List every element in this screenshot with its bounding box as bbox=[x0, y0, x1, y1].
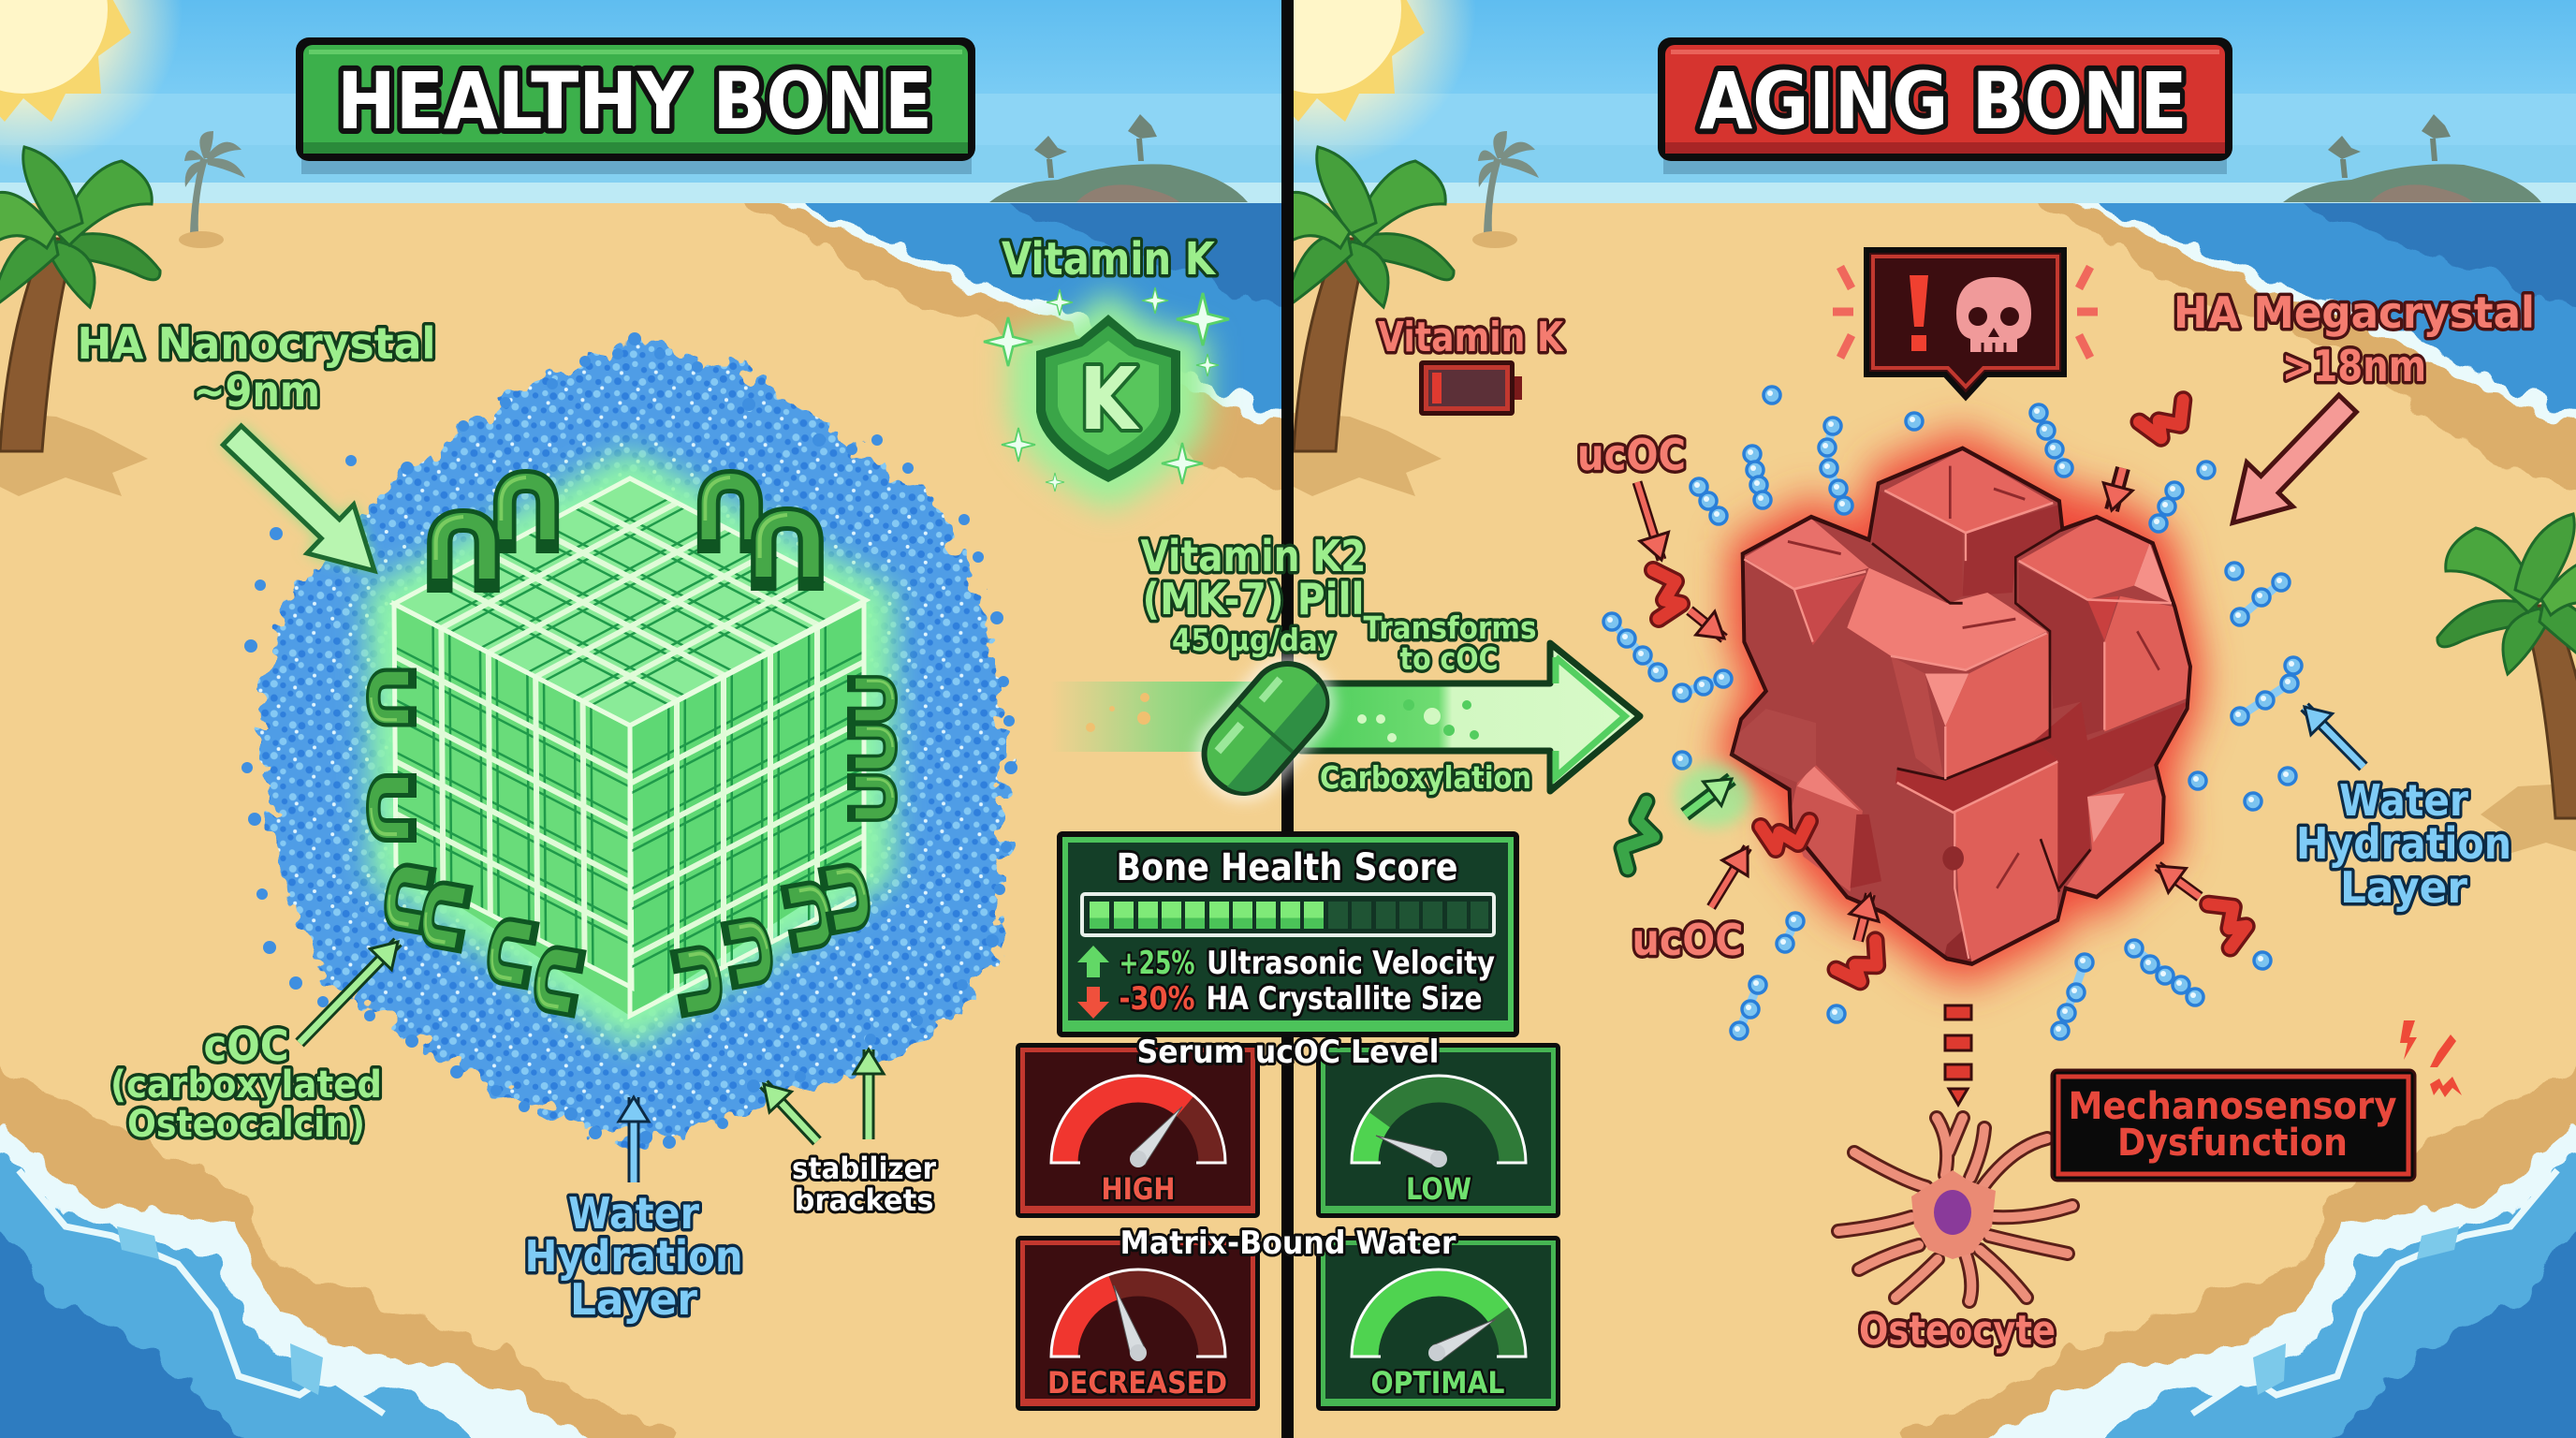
icon: vitamin K shield bbox=[984, 287, 1229, 510]
header: aging bone: AGING BONE bbox=[1700, 55, 2187, 147]
label: vitamin K2 pill: 450µg/day bbox=[1172, 622, 1335, 658]
callout: mechanosensory dysfunction: Dysfunction bbox=[2117, 1122, 2348, 1165]
gauge: serum ucOC high: HIGH bbox=[1101, 1171, 1176, 1207]
label: stabilizer brackets: brackets bbox=[794, 1182, 934, 1218]
gauge: serum ucOC high bbox=[1016, 1043, 1260, 1218]
label: transforms to coc: to cOC bbox=[1400, 640, 1498, 677]
header: healthy bone: HEALTHY BONE bbox=[337, 55, 932, 147]
background: right beach scene bbox=[1294, 0, 2576, 496]
label: ucOC lower: ucOC bbox=[1632, 915, 1743, 965]
icon: vitamin K2 pill bbox=[1178, 638, 1353, 818]
cube faces bbox=[394, 478, 866, 1016]
label: HA megacrystal bbox=[2174, 287, 2535, 391]
callout: skull warning bbox=[1833, 250, 2098, 397]
lower blocks bbox=[1732, 702, 2188, 964]
label: transforms to coc: Transforms bbox=[1363, 609, 1537, 646]
label: coc group: cOC bbox=[204, 1020, 288, 1071]
arrow: water layer bbox=[627, 1097, 640, 1182]
label: carboxylation: Carboxylation bbox=[1320, 759, 1531, 796]
header: aging bone bbox=[1658, 37, 2232, 174]
gauge: matrix water optimal: OPTIMAL bbox=[1370, 1365, 1505, 1401]
label: HA nanocrystal: HA Nanocrystal bbox=[77, 318, 436, 369]
label: HA megacrystal: HA Megacrystal bbox=[2174, 287, 2535, 338]
background: left beach scene bbox=[0, 0, 1329, 510]
heading: matrix bound water: Matrix-Bound Water bbox=[1120, 1225, 1456, 1262]
stat: ultrasonic velocity: Ultrasonic Velocity bbox=[1207, 945, 1495, 982]
stat: crystallite size bbox=[1077, 980, 1483, 1019]
top block bbox=[1872, 450, 2062, 603]
water droplets: scattered bbox=[1603, 387, 2302, 1039]
label: HA megacrystal: >18nm bbox=[2282, 341, 2426, 391]
label: water hydration layer aging: Layer bbox=[2340, 862, 2467, 913]
arrow: dashed signal to osteocyte bbox=[1945, 1005, 1971, 1105]
label: HA nanocrystal bbox=[77, 318, 436, 417]
stat: ultrasonic velocity: +25% bbox=[1120, 945, 1194, 982]
icon: vitamin K shield: K bbox=[1079, 349, 1140, 449]
label: vitamin K2 pill: Vitamin K2 bbox=[1140, 531, 1367, 581]
callout: mechanosensory dysfunction: Mechanosensory bbox=[2069, 1085, 2396, 1128]
arrow: coc bbox=[300, 942, 398, 1043]
palm shadow: right edge bbox=[2481, 783, 2576, 857]
label: water hydration layer aging: Hydration bbox=[2296, 818, 2511, 869]
crystal: HA megacrystal cluster bbox=[1716, 431, 2203, 983]
divider bbox=[1281, 0, 1294, 1438]
gauge: serum ucOC low bbox=[1316, 1043, 1560, 1218]
label: water hydration layer: Layer bbox=[570, 1274, 697, 1325]
gauge: serum ucOC low: LOW bbox=[1406, 1171, 1471, 1207]
label: transforms to coc bbox=[1363, 609, 1537, 677]
progress bar bbox=[1082, 894, 1494, 935]
label: HA nanocrystal: ~9nm bbox=[193, 366, 320, 417]
cube glow bbox=[367, 449, 894, 1049]
palm tree: right edge bbox=[2437, 514, 2576, 818]
callout: mechanosensory dysfunction bbox=[2052, 1070, 2415, 1181]
gauge: matrix water decreased bbox=[1016, 1236, 1260, 1411]
label: water hydration layer: Hydration bbox=[524, 1231, 743, 1282]
alarm rays bbox=[1833, 267, 2098, 358]
stabilizer brackets bbox=[371, 477, 893, 1009]
molecule: coc bbox=[1622, 801, 1654, 869]
icon: skull bbox=[1956, 277, 2031, 352]
label: vitamin K2 pill bbox=[1140, 531, 1367, 658]
small arrows: ucOC movement bbox=[1690, 468, 2200, 941]
arrow: to megacrystal bbox=[2210, 381, 2370, 545]
right block bbox=[2019, 517, 2188, 737]
label: water hydration layer: Water bbox=[568, 1188, 699, 1239]
red glow bbox=[1716, 431, 2203, 983]
label: vitamin K2 pill: (MK-7) Pill bbox=[1142, 574, 1365, 624]
left block bbox=[1744, 519, 1869, 645]
label: water hydration layer aging bbox=[2296, 775, 2511, 913]
icon: empty battery bbox=[1419, 360, 1522, 416]
gauge: matrix water decreased: DECREASED bbox=[1047, 1365, 1227, 1401]
icon: lightning sparks bbox=[2400, 1020, 2462, 1097]
label: vitamin K depleted: Vitamin K bbox=[1378, 314, 1565, 361]
icon: exclamation bbox=[1910, 275, 1928, 351]
label: water hydration layer aging: Water bbox=[2339, 775, 2468, 826]
label: vitamin K active: Vitamin K bbox=[1002, 233, 1217, 286]
label: coc group: Osteocalcin) bbox=[127, 1103, 365, 1146]
stat: ultrasonic velocity bbox=[1077, 945, 1495, 982]
arrow: to nanocrystal bbox=[209, 411, 398, 595]
crystal: HA nanocrystal cube bbox=[367, 449, 894, 1049]
label: osteocyte: Osteocyte bbox=[1859, 1307, 2056, 1355]
arrow: ucOC lower bbox=[1711, 847, 1748, 907]
block base bbox=[1732, 448, 2190, 964]
water hydration layer: healthy bbox=[242, 332, 1017, 1150]
stat: crystallite size: HA Crystallite Size bbox=[1206, 980, 1483, 1018]
molecules: ucOC bbox=[1653, 400, 2251, 989]
heading: serum ucOC level: Serum ucOC Level bbox=[1136, 1034, 1440, 1071]
gauge: matrix water optimal bbox=[1316, 1236, 1560, 1411]
label: ucOC upper: ucOC bbox=[1577, 430, 1686, 480]
panel title: Bone Health Score bbox=[1116, 846, 1458, 889]
arrow: green coc transform bbox=[1676, 764, 1750, 828]
arrow: carboxylation transform bbox=[1050, 643, 1640, 791]
label: stabilizer brackets: stabilizer bbox=[792, 1151, 936, 1186]
center block bbox=[1847, 568, 2050, 779]
background: left surf bbox=[0, 1039, 673, 1438]
arrow: ucOC upper bbox=[1637, 482, 1661, 560]
panel: bone health score bbox=[1057, 831, 1519, 1037]
label: water hydration layer bbox=[524, 1188, 743, 1325]
icon: osteocyte cell bbox=[1838, 1118, 2072, 1301]
outline and cracks bbox=[1732, 448, 2190, 964]
label: coc group: (carboxylated bbox=[110, 1064, 382, 1107]
stat: crystallite size: -30% bbox=[1120, 980, 1194, 1018]
label: coc group bbox=[110, 1020, 382, 1146]
arrows: stabilizer brackets bbox=[764, 1049, 869, 1141]
background: right surf bbox=[1903, 1039, 2576, 1438]
arrow: water aging bbox=[2305, 707, 2364, 767]
label: stabilizer brackets bbox=[792, 1151, 936, 1218]
header: healthy bone bbox=[296, 37, 975, 174]
